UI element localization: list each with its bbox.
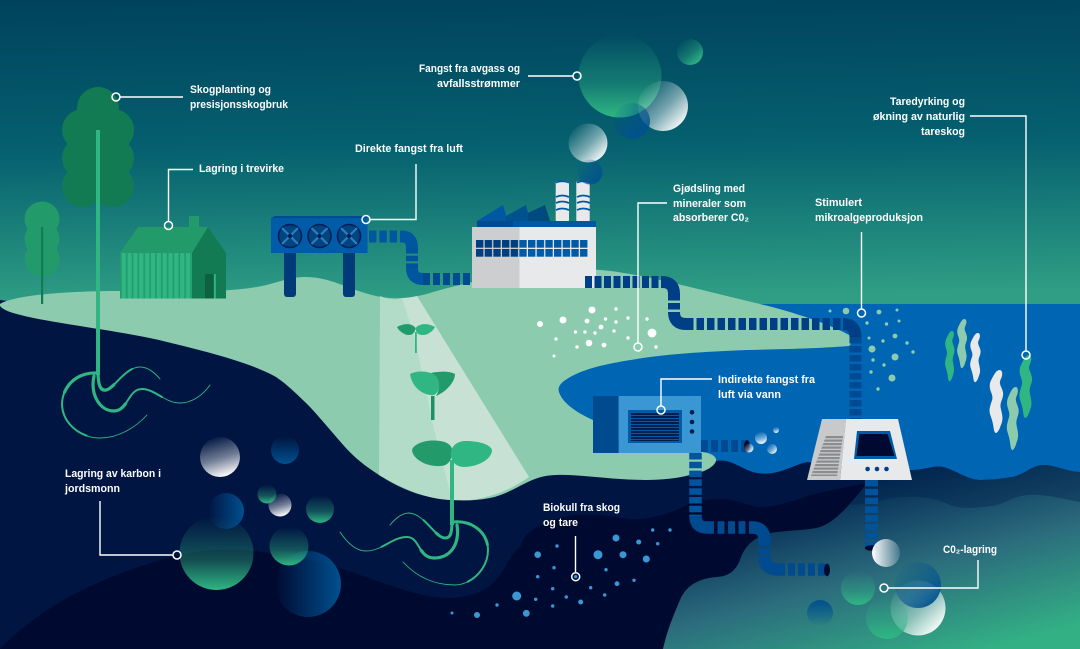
light path right side	[402, 296, 529, 500]
CO2 storage reservoir	[663, 465, 1080, 649]
mineral particles	[537, 306, 658, 358]
small tree	[24, 202, 60, 304]
microalgae particles	[828, 308, 915, 391]
label: Lagring i trevirke: Lagring i trevirke	[199, 163, 284, 175]
label: CO2-lagring: C0₂-lagring	[943, 544, 997, 556]
water bubbles	[744, 427, 779, 454]
label: Biokull: Biokull fra skog	[543, 502, 620, 514]
label: Gjødsling med mineraler: absorberer C0₂	[673, 212, 749, 224]
label: Taredyrking: tareskog	[921, 126, 965, 138]
exhaust bubbles	[568, 34, 703, 184]
indirect capture pipe to seabed	[696, 453, 826, 570]
main land	[0, 269, 851, 501]
seaweed cultivation	[945, 319, 1032, 450]
label: Lagring i trevirke	[164, 163, 284, 230]
label: Taredyrking	[873, 96, 1030, 359]
big tree with roots	[62, 87, 210, 438]
label: Lagring av karbon: Lagring av karbon i	[65, 468, 161, 480]
factory pipe to water	[585, 282, 856, 419]
label: Indirekte fangst	[657, 374, 816, 414]
label: Fangst fra avgass	[419, 63, 581, 90]
label: Skogplanting	[112, 84, 289, 111]
label: Fangst fra avgass: Fangst fra avgass og	[419, 63, 520, 75]
direct air capture unit	[271, 216, 368, 297]
label: Stimulert mikroalgeproduksjon: mikroalgeproduksjon	[815, 212, 923, 224]
label: Stimulert mikroalgeproduksjon	[815, 197, 923, 317]
label: Lagring av karbon	[64, 468, 181, 559]
deep soil layer	[0, 480, 880, 649]
indirect capture unit	[593, 396, 701, 453]
label: Direkte fangst fra luft	[355, 143, 463, 224]
seedling medium	[410, 372, 455, 420]
label: Taredyrking: økning av naturlig	[873, 111, 965, 123]
factory	[472, 181, 596, 288]
label: Biokull: og tare	[543, 517, 578, 529]
seabed and soil	[0, 300, 1080, 649]
label: Gjødsling med mineraler: mineraler som	[673, 198, 746, 210]
pipe end seabed	[824, 564, 830, 576]
label: Fangst fra avgass: avfallsstrømmer	[437, 78, 521, 90]
light path left side	[379, 296, 452, 500]
label: Indirekte fangst: luft via vann	[718, 389, 781, 401]
label: Biokull	[543, 502, 620, 581]
label: Lagring av karbon: jordsmonn	[64, 483, 120, 495]
house	[120, 216, 226, 298]
sky background	[0, 0, 1080, 304]
seedling large with roots	[340, 440, 492, 585]
label: Skogplanting: Skogplanting og	[190, 84, 271, 96]
ocean treatment unit	[807, 419, 912, 480]
label: CO2-lagring	[880, 544, 997, 592]
label: Gjødsling med mineraler	[634, 183, 749, 351]
label: Gjødsling med mineraler: Gjødsling med	[673, 183, 745, 195]
indirect capture outlet pipe	[701, 440, 750, 452]
biochar particles	[450, 528, 672, 618]
reservoir upper band	[850, 465, 1080, 508]
label: Taredyrking: Taredyrking og	[890, 96, 965, 108]
CO2 storage bubbles	[807, 539, 946, 639]
storage pipe under ocean unit	[865, 480, 878, 551]
soil carbon bubbles	[180, 436, 341, 617]
label: Indirekte fangst: Indirekte fangst fra	[718, 374, 816, 386]
label: Stimulert mikroalgeproduksjon: Stimulert	[815, 197, 862, 209]
seedling small	[397, 324, 435, 353]
label: Skogplanting: presisjonsskogbruk	[190, 99, 289, 111]
direct air capture pipe	[369, 236, 472, 279]
sea	[0, 304, 1080, 649]
label: Direkte fangst fra luft: Direkte fangst fra luft	[355, 143, 463, 155]
